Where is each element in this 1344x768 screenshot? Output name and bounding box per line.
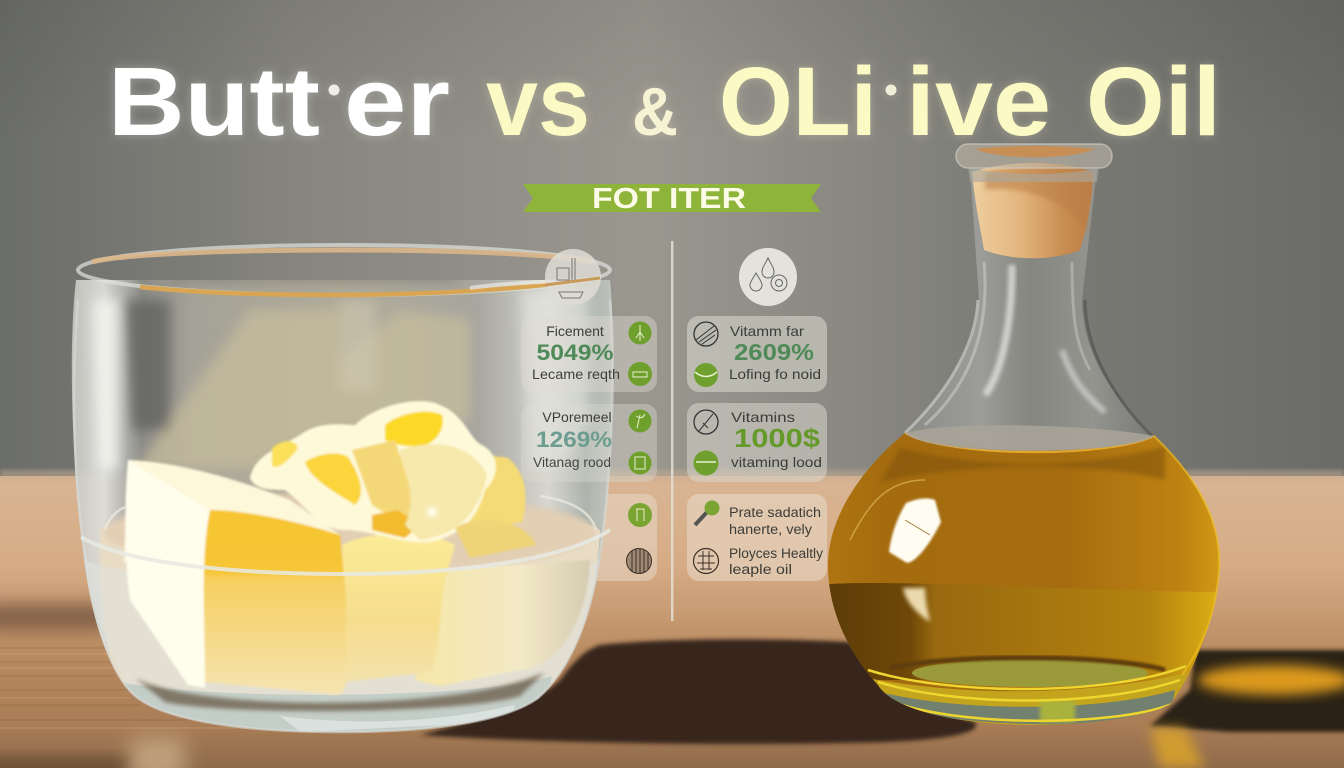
neck highlights	[905, 262, 1152, 436]
ribbon banner	[523, 183, 821, 215]
label: Vitamm far	[730, 323, 804, 339]
sublabel: vitaming lood	[731, 454, 822, 470]
shadow in upper oil	[880, 446, 1165, 482]
value: 1269%	[536, 427, 612, 452]
central divider	[671, 241, 673, 621]
bottle lip	[956, 144, 1112, 168]
title dot in Olive	[886, 84, 896, 96]
title symbol: ampersand: &	[632, 74, 678, 150]
olive oil bottle	[820, 144, 1230, 740]
title word: Oil: Oil	[1086, 47, 1221, 156]
cork	[972, 163, 1093, 258]
icon: green bowl	[694, 363, 718, 387]
title	[108, 47, 1221, 156]
sublabel: Lofing fo noid	[729, 366, 821, 382]
right rear butter block	[450, 450, 525, 530]
glass contents clipped to the bowl	[84, 260, 600, 740]
panel: olive stats 2	[687, 403, 827, 482]
icon: sketched herb	[694, 410, 718, 434]
label: VPoremeel	[542, 409, 612, 425]
oil window reflection	[889, 498, 941, 563]
icon: round grid	[694, 548, 718, 574]
panel: olive stats 1	[687, 316, 827, 392]
panel: butter stats 3	[521, 494, 657, 581]
crumbled butter top	[250, 401, 536, 558]
oil body	[820, 425, 1230, 735]
center butter block	[342, 534, 455, 682]
label: Ficement	[546, 323, 604, 339]
icon: square badge	[628, 452, 652, 474]
butter pieces	[124, 401, 590, 695]
large butter block front face	[204, 510, 346, 695]
background wall	[0, 0, 1344, 480]
milk pool in bowl	[100, 522, 600, 701]
large butter block left face	[125, 460, 210, 688]
panel: olive stats 3	[687, 494, 827, 581]
value: 1000$	[734, 423, 821, 453]
flask edges	[905, 433, 1154, 452]
left icon badge behind the rim	[545, 249, 601, 305]
value: 5049%	[536, 340, 614, 365]
darker lower oil	[820, 583, 1230, 680]
icon: leaf	[628, 322, 652, 344]
flask contents clipped to outline	[828, 433, 1220, 725]
shadow on table	[420, 639, 1344, 768]
glass rim and waterline highlights	[74, 245, 613, 732]
bottle base glass	[872, 672, 1190, 725]
icon: sketched seed	[694, 322, 718, 346]
right icon badge	[739, 248, 797, 306]
glass reflections	[93, 260, 590, 470]
icon: green badge	[628, 362, 652, 386]
icon: green dish	[694, 450, 718, 476]
text: first note: Prate sadatich	[729, 505, 821, 520]
title dot in Butter	[328, 84, 340, 96]
yellow edge lines	[868, 666, 1186, 721]
title word: er: er	[344, 47, 450, 156]
icon: striped circle	[626, 548, 652, 574]
sublabel: Vitanag rood	[533, 454, 611, 470]
wooden table	[0, 470, 1344, 768]
title word: Butt: Butt	[108, 47, 320, 156]
panel: olive stats 3: hanerte, vely	[729, 522, 812, 537]
panel: olive stats 3: leaple oil	[729, 562, 792, 577]
icon: spoon	[695, 500, 720, 525]
label: Vitamins	[731, 409, 795, 425]
oil pool ellipse	[912, 659, 1148, 687]
icon: herb	[628, 410, 652, 432]
panel: butter stats 1	[521, 316, 657, 392]
panel: butter stats 2	[521, 404, 657, 482]
lower glass base	[124, 676, 552, 732]
glass body	[72, 280, 613, 732]
title word: vs: vs	[486, 47, 590, 156]
large butter block top face	[124, 460, 340, 563]
text: second note: Ployces Healtly	[729, 546, 823, 561]
sublabel: Lecame reqth	[532, 366, 620, 382]
bottle neck and shoulder glass	[905, 168, 1154, 454]
banner text: FOT ITER	[592, 183, 746, 215]
value: 2609%	[734, 339, 814, 365]
glass bowl	[72, 260, 613, 740]
title word: ive: ive	[906, 47, 1051, 156]
title word: OLi: OLi	[719, 47, 877, 156]
icon: green tag	[628, 503, 652, 527]
right front butter block	[415, 560, 590, 686]
